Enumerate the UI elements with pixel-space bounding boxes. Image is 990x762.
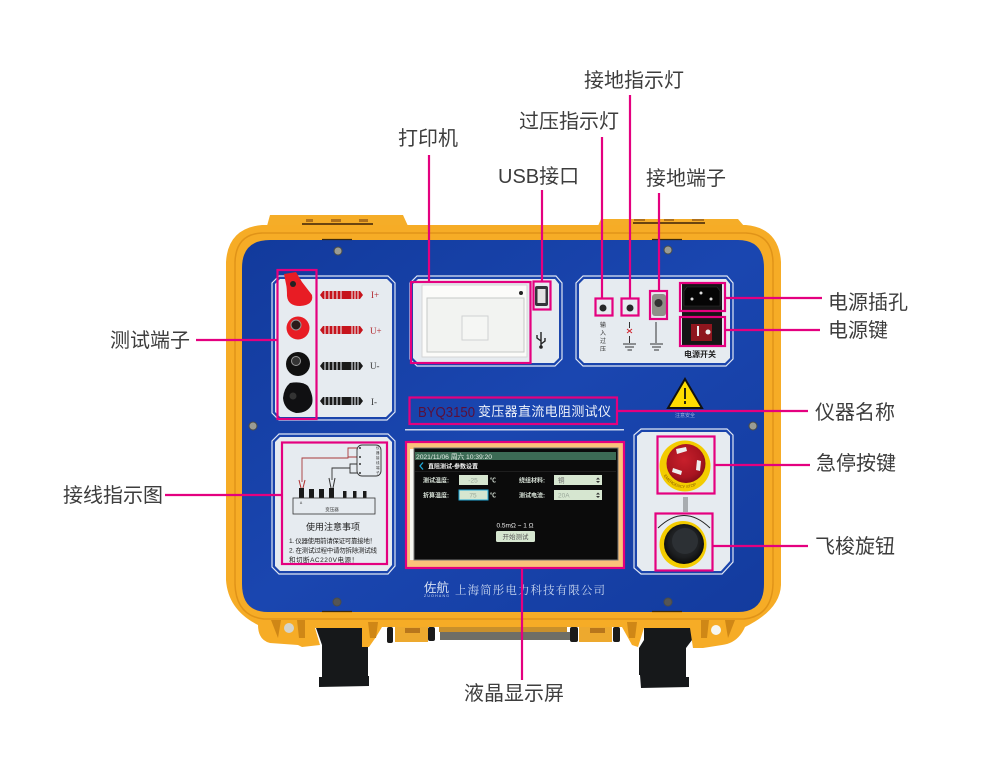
- wiring schematic: 仪: [376, 445, 380, 450]
- instrument name: [418, 404, 611, 421]
- overvoltage lamp: 压: [600, 346, 606, 353]
- label: 急停按键: 急停按键: [816, 452, 896, 475]
- parameter form: 折算温度:: [423, 492, 449, 500]
- ground lamp: [623, 304, 636, 350]
- label: 电源插孔: 电源插孔: [828, 291, 908, 314]
- top hinges: [267, 215, 744, 226]
- label: 液晶显示屏: 液晶显示屏: [464, 682, 564, 705]
- panel: emergency stop and knob: [633, 428, 734, 575]
- parameter form: -25: [468, 478, 478, 484]
- label: 电源键: 电源键: [828, 319, 888, 342]
- wiring schematic: 变压器: [325, 506, 339, 513]
- lug holes: [284, 623, 294, 633]
- stripes and labels: I-: [371, 397, 377, 407]
- panel: printer and USB: [410, 276, 562, 366]
- stripes and labels: [320, 290, 382, 407]
- screen title: 直阻测试-参数设置: [428, 462, 478, 470]
- wiring schematic: 线: [376, 460, 380, 465]
- wiring schematic: 接: [376, 455, 380, 460]
- label: USB接口: USB接口: [498, 165, 579, 188]
- company logo: ZUOHANG: [424, 594, 449, 598]
- label: 过压指示灯: 过压指示灯: [519, 110, 619, 133]
- label: 液晶显示屏: [464, 568, 564, 705]
- stripes and labels: U+: [370, 326, 382, 336]
- screen title: [415, 462, 616, 472]
- range and start button: 开始测试: [502, 532, 529, 541]
- power switch: [691, 324, 712, 341]
- highlight boxes: [278, 270, 725, 570]
- USB port: [535, 286, 548, 306]
- label: 接线指示图: 接线指示图: [63, 484, 163, 507]
- parameter form: 绕组材料:: [519, 476, 545, 484]
- overvoltage lamp: [600, 304, 606, 353]
- company logo: 佐航: [424, 580, 450, 595]
- switch label: 电源开关: [684, 349, 716, 359]
- terminal I-: [283, 382, 312, 413]
- range and start button: 0.5mΩ ~ 1 Ω: [496, 522, 534, 530]
- warning triangle: [668, 379, 702, 419]
- front hinges: [387, 625, 620, 643]
- parameter form: [423, 475, 602, 500]
- panel: wiring diagram: [272, 434, 395, 574]
- overvoltage lamp: 过: [600, 337, 606, 345]
- parameter form: ℃: [490, 478, 496, 484]
- parameter form: ℃: [490, 492, 496, 500]
- notice text: 2. 在测试过程中请勿拆除测试线: [289, 546, 378, 554]
- overvoltage lamp: 输: [600, 321, 606, 329]
- range and start button: [496, 522, 535, 542]
- indicator symbol: [683, 497, 688, 512]
- wiring schematic: 子: [376, 470, 380, 475]
- warning triangle: 注意安全: [675, 412, 695, 419]
- emergency stop button: EMERGENCY STOP: [664, 474, 696, 488]
- instrument name: BYQ3150: [418, 404, 475, 421]
- printer: [422, 285, 527, 357]
- instrument name: 变压器直流电阻测试仪: [478, 404, 611, 419]
- label: 仪器名称: 仪器名称: [815, 401, 895, 424]
- terminal U-: [286, 352, 310, 376]
- parameter form: 测试电流:: [519, 492, 545, 500]
- label: 打印机: 打印机: [398, 127, 458, 150]
- wiring schematic: [293, 445, 381, 514]
- label: 飞梭旋钮: 飞梭旋钮: [815, 535, 895, 558]
- terminal I+: [284, 272, 312, 306]
- parameter form: 20A: [558, 492, 570, 500]
- stripes and labels: I+: [371, 290, 379, 300]
- lug slots: [271, 620, 735, 638]
- label: USB接口: [498, 165, 579, 281]
- notice text: [289, 521, 378, 564]
- notice text: 1. 仪器使用前请保证可靠接地！: [289, 536, 376, 545]
- terminal U+: [286, 316, 310, 340]
- stripes and labels: U-: [370, 361, 380, 371]
- company logo: 上海简彤电力科技有限公司: [455, 583, 605, 597]
- blue faceplate: [242, 240, 764, 612]
- notice text: 和切断AC220V电源！: [289, 555, 358, 564]
- notice text: 使用注意事项: [306, 521, 360, 532]
- wiring schematic: A: [300, 501, 303, 505]
- status bar: [415, 452, 616, 461]
- label: 测试端子: 测试端子: [110, 329, 190, 352]
- power socket: [682, 283, 722, 345]
- overvoltage lamp: 入: [600, 330, 606, 337]
- jog knob: [660, 521, 706, 568]
- ground terminal: [650, 294, 666, 350]
- panel: power and ground: [576, 276, 733, 366]
- parameter form: 75: [469, 492, 477, 500]
- label: 接地端子: 接地端子: [646, 167, 726, 190]
- yellow body: [226, 225, 781, 648]
- wiring schematic: 端: [376, 465, 380, 470]
- arc arrows: [658, 516, 710, 528]
- panel: LCD screen: [406, 442, 624, 568]
- label: 接地指示灯: 接地指示灯: [584, 69, 684, 92]
- company logo: [424, 580, 605, 598]
- label: 接地端子: [646, 167, 726, 291]
- emergency stop button: [660, 440, 710, 492]
- parameter form: 测试温度:: [423, 476, 449, 484]
- screws: [249, 246, 757, 606]
- wiring schematic: 器: [376, 451, 380, 455]
- panel: test terminals: [272, 272, 395, 420]
- divider line: [405, 429, 624, 430]
- carrying straps: [315, 625, 692, 688]
- parameter form: 铜: [558, 476, 565, 484]
- USB symbol: [537, 332, 545, 349]
- status bar: 2021/11/06 周六 10:39:20: [416, 452, 492, 461]
- instrument case: [226, 215, 781, 688]
